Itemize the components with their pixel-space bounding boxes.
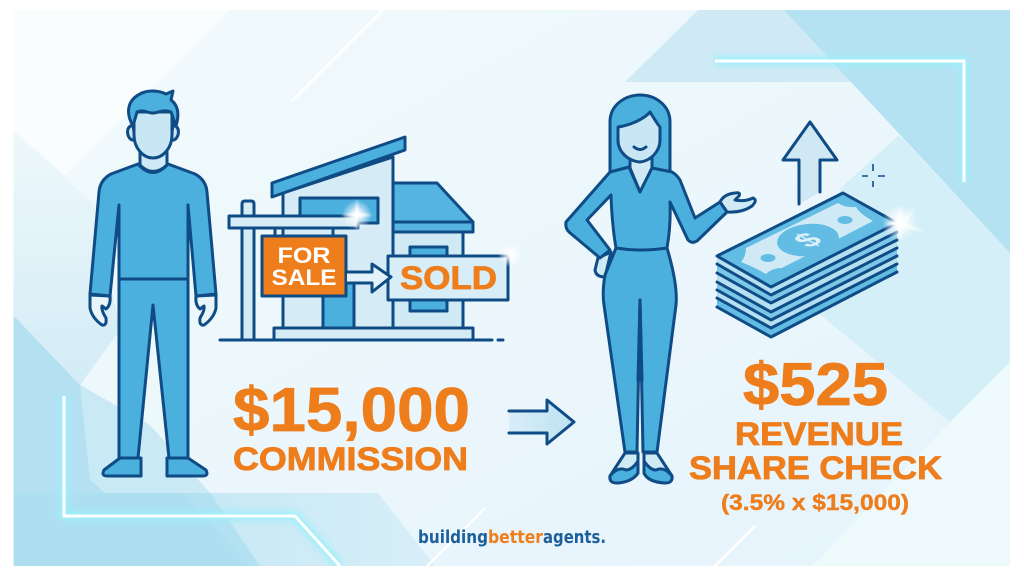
arrow: commission to revenue share <box>509 400 574 444</box>
woman: hair <box>610 95 670 172</box>
man: right hand <box>196 295 216 325</box>
woman: right shoe <box>644 453 672 483</box>
house illustration <box>220 137 508 340</box>
man figure <box>90 91 216 476</box>
house: main wall <box>283 157 393 328</box>
woman: left hand <box>595 252 611 277</box>
sparkle on money <box>882 205 925 241</box>
woman: right hand <box>720 193 755 212</box>
woman: blouse <box>566 167 727 258</box>
house: base <box>274 328 473 340</box>
glow frame: bottom left <box>64 396 340 566</box>
sold sign <box>388 256 508 300</box>
sign post <box>242 201 254 340</box>
man: sweater <box>90 164 216 296</box>
money: layer lines <box>717 232 897 337</box>
sign crossbar <box>229 216 358 228</box>
revenue share label <box>689 416 942 486</box>
arrow: upward growth <box>783 122 837 204</box>
sign hangers <box>275 228 333 236</box>
for sale sign <box>262 236 346 296</box>
for sale text: FOR <box>278 243 330 268</box>
man: hair <box>129 91 178 126</box>
revenue share formula: (3.5% x $15,000) <box>721 490 909 515</box>
woman: leg seam <box>638 300 642 380</box>
arrow: for sale to sold <box>347 264 391 292</box>
man: shoes <box>103 458 207 476</box>
money: bill inner panel <box>741 203 873 274</box>
money: top bill <box>717 193 897 287</box>
commission amount: $15,000 <box>233 376 470 445</box>
house: right wing roof <box>393 183 473 232</box>
man: left hand <box>90 295 110 325</box>
sparkle on sold sign <box>498 243 522 267</box>
revenue share label: REVENUE <box>735 416 903 452</box>
sold text: SOLD <box>400 260 497 296</box>
commission label: COMMISSION <box>233 441 468 477</box>
ground line <box>220 338 503 342</box>
woman: neck <box>630 155 652 192</box>
money: dollar sign: $ <box>787 228 831 252</box>
woman: left shoe <box>610 453 638 483</box>
logo: building <box>418 528 488 548</box>
logo: agents. <box>543 528 606 548</box>
house: door <box>323 283 354 328</box>
sparkle: plus mark <box>862 164 885 187</box>
stack of money <box>717 193 897 337</box>
sparkle on house window <box>341 199 373 231</box>
money: small ovals <box>760 216 852 262</box>
for sale text: SALE <box>272 265 336 290</box>
woman: trousers <box>603 248 676 452</box>
man: ears <box>128 125 178 140</box>
revenue share amount: $525 <box>743 351 888 418</box>
house: right wing window <box>410 247 447 311</box>
man: neck <box>140 150 167 172</box>
money: centre medallion <box>775 221 841 259</box>
house: upper window <box>300 198 378 223</box>
revenue share label: SHARE CHECK <box>689 450 942 486</box>
money: layer fills <box>717 223 897 337</box>
man: face <box>134 112 172 158</box>
glow frame: top right <box>715 61 964 182</box>
house: main roof <box>272 137 405 197</box>
house: right wing wall <box>393 232 463 328</box>
woman figure <box>566 95 755 483</box>
logo: better <box>488 528 543 548</box>
man: trousers <box>119 279 188 458</box>
logo <box>418 528 606 548</box>
woman: smile <box>634 147 646 150</box>
woman: face <box>618 112 660 162</box>
